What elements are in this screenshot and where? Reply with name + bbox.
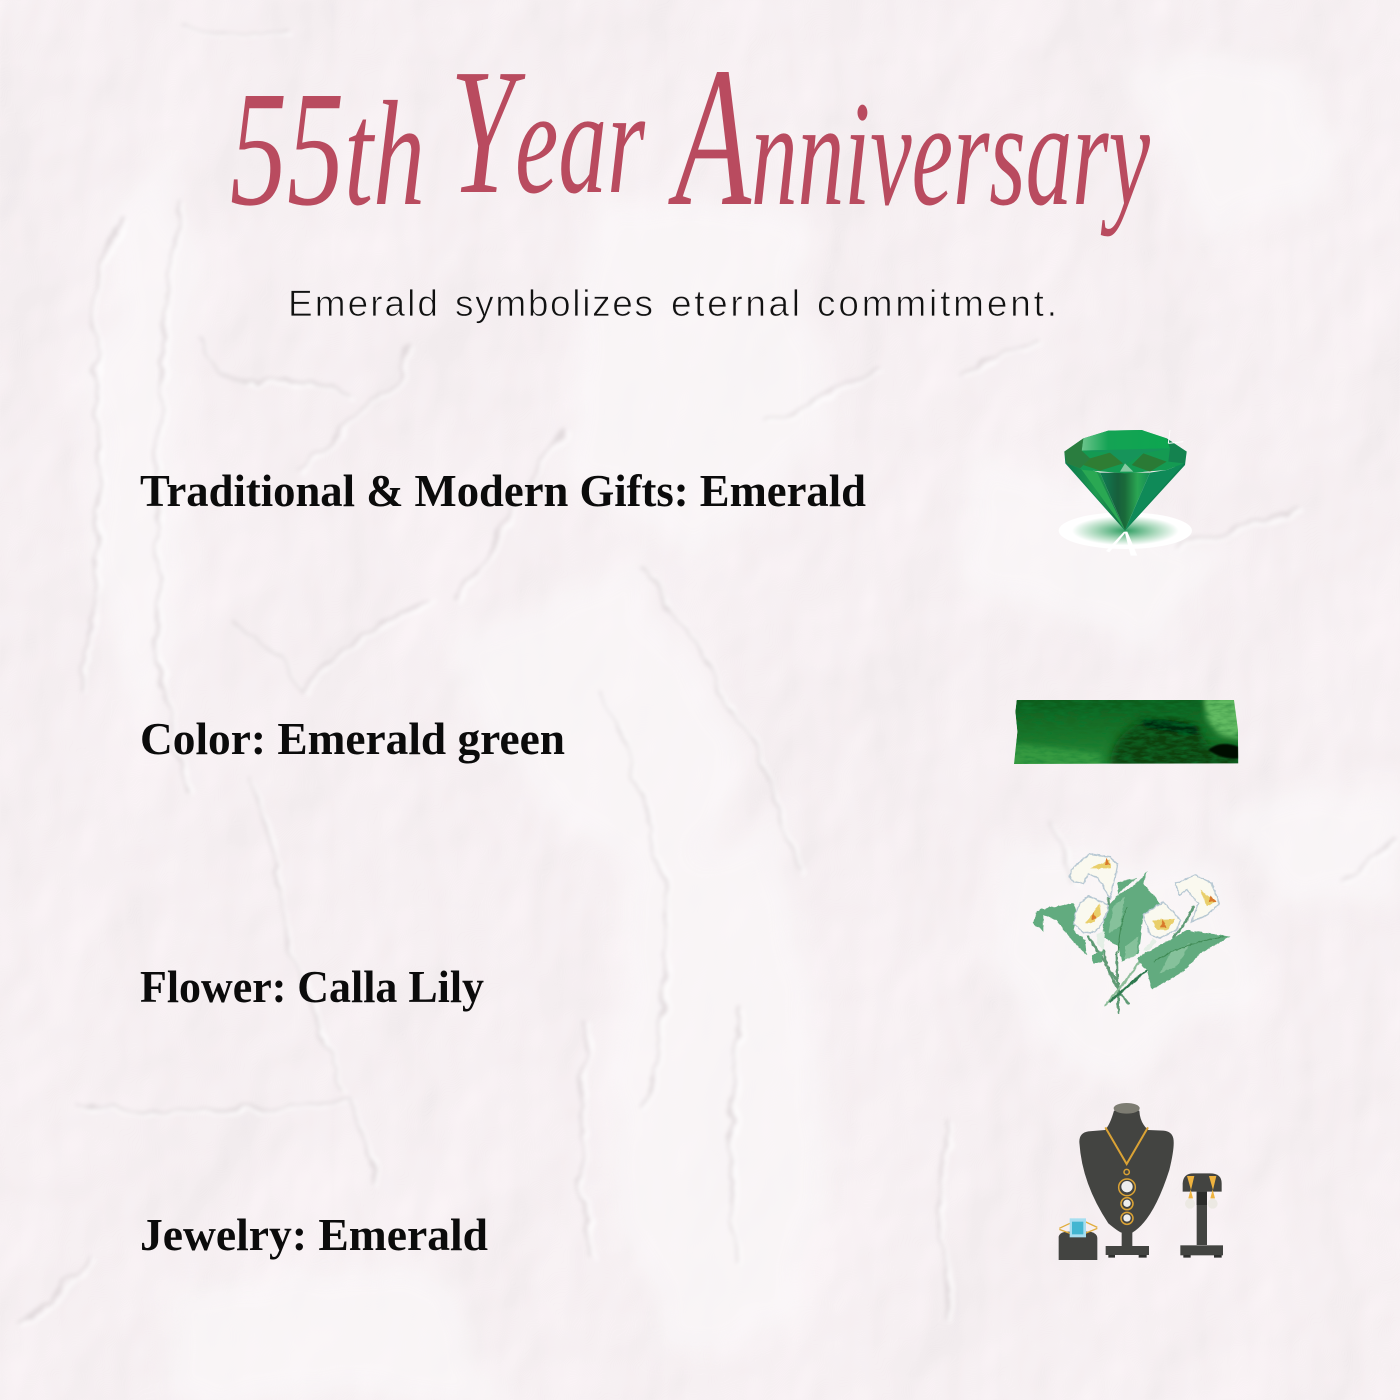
title: Anniversary (668, 27, 1150, 248)
subtitle: commitment. (817, 283, 1057, 324)
title: Year (450, 32, 645, 231)
subtitle: Emerald (288, 283, 438, 324)
icon: emerald gem (1059, 430, 1192, 556)
necklace bust (1079, 1103, 1174, 1258)
earrings (1187, 1176, 1216, 1198)
stems (1088, 898, 1193, 1013)
ring box (1059, 1232, 1097, 1260)
title (230, 27, 1150, 248)
title: 55th (230, 57, 425, 240)
necklace chain (1105, 1127, 1148, 1224)
label: flower: Flower: Calla Lily (140, 961, 484, 1012)
label: jewelry: Jewelry: Emerald (140, 1209, 488, 1260)
ring (1059, 1222, 1097, 1233)
icon: calla lily bouquet (1033, 854, 1230, 1013)
subtitle: symbolizes (455, 283, 653, 324)
blooms (1069, 854, 1219, 952)
leaves (1033, 872, 1230, 989)
subtitle (288, 283, 1057, 324)
label: color: Color: Emerald green (140, 713, 565, 764)
icon: jewelry display (1059, 1103, 1223, 1260)
earring stand (1180, 1173, 1223, 1255)
subtitle: eternal (671, 283, 800, 324)
label: gifts: Traditional & Modern Gifts: Emerald (140, 465, 866, 516)
color swatch: emerald green band (1014, 700, 1238, 764)
